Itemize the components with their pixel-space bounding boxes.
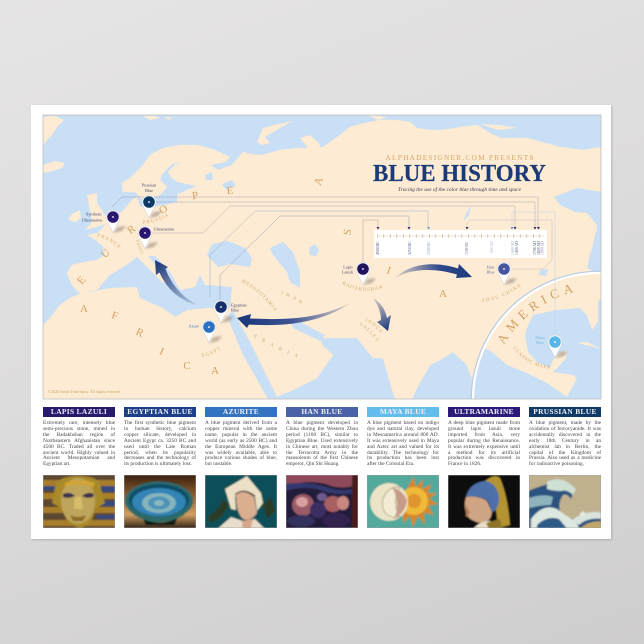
pin: prussian blue	[142, 182, 162, 218]
text: azurite: copper mineral with the same	[205, 426, 277, 432]
leader lines	[112, 196, 556, 310]
text: maya blue: after the Colonial Era.	[367, 461, 414, 467]
continent and region labels: BADAKHSHAN	[342, 281, 382, 291]
header: egyptian blue: EGYPTIAN BLUE	[127, 407, 193, 416]
pin: synthetic ultramarine: Ultramarine	[82, 217, 102, 222]
arrow: Badakhshan to Egypt	[237, 302, 352, 328]
text: egyptian blue: copper silicate, developed in	[124, 432, 196, 438]
pin: han blue: Han	[487, 264, 495, 270]
continent and region labels: MESOPOTAMIA	[241, 279, 276, 312]
text: prussian blue: oxidation of ferrocyanide. It was	[529, 426, 601, 432]
text: azurite: world (as early as 2500 BC) and	[205, 438, 277, 444]
continent and region labels: R	[125, 222, 139, 237]
timeline: 2500 BC	[427, 241, 431, 255]
header: azurite	[205, 407, 277, 417]
timeline: 1400 AD	[511, 241, 515, 255]
ocean	[43, 115, 601, 399]
image: sun and moon	[367, 475, 439, 528]
pin: synthetic ultramarine	[82, 210, 126, 233]
text: azurite: A blue pigment derived from a	[205, 420, 277, 426]
copyright note: ©2020 Sasha Trubetskoy. All rights reserved	[48, 389, 120, 394]
image: portrait of a lady in white coif	[205, 475, 277, 528]
text: han blue: mausoleum of the first Chinese	[286, 455, 358, 461]
timeline: 3250 BC	[408, 241, 412, 255]
pin: egyptian blue: Egyptian	[231, 302, 247, 308]
pin: prussian blue: Blue	[145, 188, 153, 193]
pin: maya blue	[535, 335, 568, 358]
arrow: Badakhshan to Indus	[373, 298, 391, 331]
header: prussian blue: PRUSSIAN BLUE	[533, 407, 597, 416]
text: maya blue: durability. The technology for	[367, 450, 439, 456]
continent and region labels: C	[183, 360, 191, 372]
inset: America circle	[470, 270, 601, 399]
text: ultramarine: ground lapis lazuli stone	[448, 426, 520, 432]
continent and region labels: AMERICA	[498, 284, 574, 345]
continent and region labels: E	[226, 185, 234, 197]
text: azurite: was widely available, able to	[205, 450, 277, 456]
text: azurite	[205, 420, 277, 467]
pin: azurite	[188, 320, 222, 343]
timeline: 1400 AD	[515, 241, 519, 255]
text: maya blue: its production has been lost	[367, 455, 439, 461]
continent and region labels: ZHOU CHINA	[482, 284, 521, 302]
text: ultramarine	[448, 420, 520, 467]
header: ultramarine: ULTRAMARINE	[454, 407, 514, 416]
header: maya blue	[367, 407, 439, 417]
text: lapis lazuli: Extremely rare, intensely blue	[43, 420, 115, 426]
text: prussian blue: accidentally discovered in the	[529, 432, 601, 438]
text: lapis lazuli: Northeastern Afghanistan since	[43, 438, 115, 444]
pin: lapis lazuli	[342, 262, 376, 285]
text: egyptian blue: Ancient Egypt ca. 3250 BC and	[124, 438, 196, 444]
text: lapis lazuli: semi-precious stone, mined in	[43, 426, 115, 432]
text: maya blue: in Mesoamerica around 800 AD.	[367, 432, 439, 438]
text: han blue: period (1100 BC), similar to	[286, 432, 358, 438]
arrow: Egypt to Europe	[155, 260, 197, 305]
inset land strip	[596, 230, 597, 232]
continent and region labels: U	[99, 247, 113, 261]
text: maya blue	[367, 420, 439, 467]
text: ultramarine: a method for its artificial	[448, 450, 520, 456]
text: prussian blue	[529, 420, 601, 467]
text: egyptian blue: its production is ultimately lost.	[124, 461, 192, 467]
continent and region labels: E	[75, 274, 89, 287]
main title: BLUE HISTORY	[373, 161, 546, 187]
text: maya blue: It was extensively used in Maya	[367, 438, 439, 444]
pin: maya blue: Maya	[535, 335, 545, 340]
subtitle: Tracing the use of the color blue through time and space	[398, 186, 522, 193]
image: han dynasty mural	[286, 475, 358, 528]
text: han blue: in Chinese art, most notably for	[286, 444, 358, 450]
pin: lapis lazuli: Lapis	[343, 264, 353, 270]
continent and region labels: A	[211, 365, 219, 377]
text: prussian blue: A blue pigment, made by the	[529, 420, 601, 426]
continent and region labels	[76, 178, 574, 374]
timeline: 4500 BC	[376, 241, 380, 255]
continent and region labels: O	[157, 203, 170, 217]
text: maya blue: A blue pigment based on indigo	[367, 420, 439, 426]
map	[43, 115, 601, 399]
text: prussian blue: for radioactive poisoning.	[529, 461, 584, 467]
presenter line: ALPHADESIGNER.COM PRESENTS	[386, 153, 534, 162]
timeline: 1100 BC	[465, 241, 469, 255]
text: han blue: the Terracotta Army in the	[286, 450, 358, 456]
continent and region labels: PRUSSIA	[142, 214, 169, 224]
islands	[43, 116, 516, 230]
title block	[373, 153, 546, 193]
seas and lakes	[80, 172, 601, 399]
text: lapis lazuli: the Badakhshan region of	[43, 432, 115, 438]
pin: egyptian blue	[214, 300, 247, 323]
image: egyptian blue bowl	[124, 475, 196, 528]
text: ultramarine: A deep blue pigment made from	[448, 420, 520, 426]
continent and region labels: IRAN	[281, 290, 303, 304]
text: lapis lazuli: ancient world. Highly valued in	[43, 450, 115, 456]
text: egyptian blue: used until the Late Roman	[124, 444, 196, 450]
continent and region labels: A	[80, 303, 88, 315]
timeline	[374, 230, 547, 258]
header: azurite: AZURITE	[223, 407, 259, 416]
continent and region labels: I	[385, 265, 393, 277]
continent and region labels: P	[191, 190, 199, 202]
poster sheet	[31, 105, 611, 539]
continent and region labels: INDUS	[365, 318, 382, 332]
pin: lapis lazuli: Lazuli	[342, 270, 354, 274]
text: ultramarine: popular during the Renaissance.	[448, 438, 520, 444]
text: prussian blue: alchemist lab in Berlin, the	[529, 444, 601, 450]
text: azurite: produce various shades of blue,	[205, 455, 277, 461]
pin: synthetic ultramarine: Synthetic	[86, 211, 102, 216]
header: lapis lazuli: LAPIS LAZULI	[51, 407, 107, 416]
header: han blue: HAN BLUE	[301, 407, 343, 416]
text: maya blue: dye and natural clay, developed	[367, 426, 439, 432]
pin: han blue: Blue	[486, 270, 495, 274]
image: golden funerary mask	[43, 475, 115, 528]
text: maya blue: and Aztec art and valued for its	[367, 444, 439, 450]
image: girl with a pearl earring	[448, 475, 520, 528]
map and images artwork	[42, 114, 602, 528]
pin: ultramarine: Ultramarine	[154, 226, 174, 232]
text: prussian blue: Prussia. Also used as a medicine	[529, 455, 601, 461]
pin: maya blue: Blue	[536, 340, 544, 345]
header: han blue	[286, 407, 358, 417]
continent and region labels: S	[342, 228, 354, 236]
geography	[43, 115, 601, 399]
text: azurite: name, popular in the ancient	[205, 432, 277, 438]
continent and region labels: A	[439, 288, 447, 300]
text: ultramarine: France in 1826.	[448, 461, 481, 467]
continent and region labels: VENICE	[136, 239, 144, 255]
text: ultramarine: production was discovered in	[448, 455, 520, 461]
pin: prussian blue: Prussian	[142, 182, 157, 188]
continent and region labels: CLASSIC MAYA	[514, 346, 550, 369]
continent and region labels: VALLEY	[360, 322, 380, 341]
pin: egyptian blue: Blue	[231, 308, 239, 312]
text: azurite: the European Middle Ages. It	[205, 444, 277, 450]
text: egyptian blue: The first synthetic blue pigment	[124, 420, 196, 426]
text: lapis lazuli	[43, 420, 115, 467]
timeline: 1826 AD	[537, 241, 541, 255]
text: egyptian blue: decreases and the technology of	[124, 455, 196, 461]
continent and region labels: R	[134, 326, 146, 340]
timeline arrowheads	[376, 227, 540, 230]
map border	[43, 115, 601, 399]
pin: azurite: Azure	[188, 324, 199, 328]
text: ultramarine: imported from Asia, very	[448, 432, 520, 438]
text: egyptian blue: in human history, calcium	[124, 426, 196, 432]
continent and region labels: I	[157, 346, 166, 358]
text: azurite: but unstable.	[205, 461, 232, 467]
text: han blue	[286, 420, 358, 467]
pin: ultramarine	[138, 226, 174, 249]
text: han blue: emperor, Qin Shi Huang.	[286, 461, 340, 467]
timeline: 1706 AD	[533, 241, 537, 255]
text: egyptian blue	[124, 420, 196, 467]
text: han blue: A blue pigment developed in	[286, 420, 358, 426]
land: Afro-Eurasia	[43, 120, 601, 399]
pin: han blue	[486, 262, 517, 285]
text: ultramarine: It was extremely expensive until	[448, 444, 520, 450]
continent and region labels: FRANCE	[97, 234, 121, 248]
text: lapis lazuli: 4500 BC. Traded all over the	[43, 444, 115, 450]
image: great wave	[529, 475, 601, 528]
text: prussian blue: early 18th Century in an	[529, 438, 601, 444]
arrow: Badakhshan to China	[395, 264, 472, 278]
text: han blue: Egyptian Blue. Used extensively	[286, 438, 358, 444]
header: maya blue: MAYA BLUE	[380, 407, 426, 416]
timeline: 800 AD	[490, 241, 494, 253]
continent and region labels: ARABIA	[253, 334, 298, 358]
continent and region labels: EGYPT	[202, 346, 220, 357]
continent and region labels: F	[110, 309, 120, 323]
text: prussian blue: capital of the Kingdom of	[529, 450, 601, 456]
text: lapis lazuli: Ancient Mesopotamian and	[43, 455, 115, 461]
text: han blue: China during the Western Zhou	[286, 426, 358, 432]
continent and region labels: A	[312, 176, 326, 187]
timeline: 1900 AD	[540, 241, 544, 255]
text: lapis lazuli: Egyptian art.	[43, 461, 71, 467]
text: egyptian blue: period, when its popularity	[124, 450, 196, 456]
